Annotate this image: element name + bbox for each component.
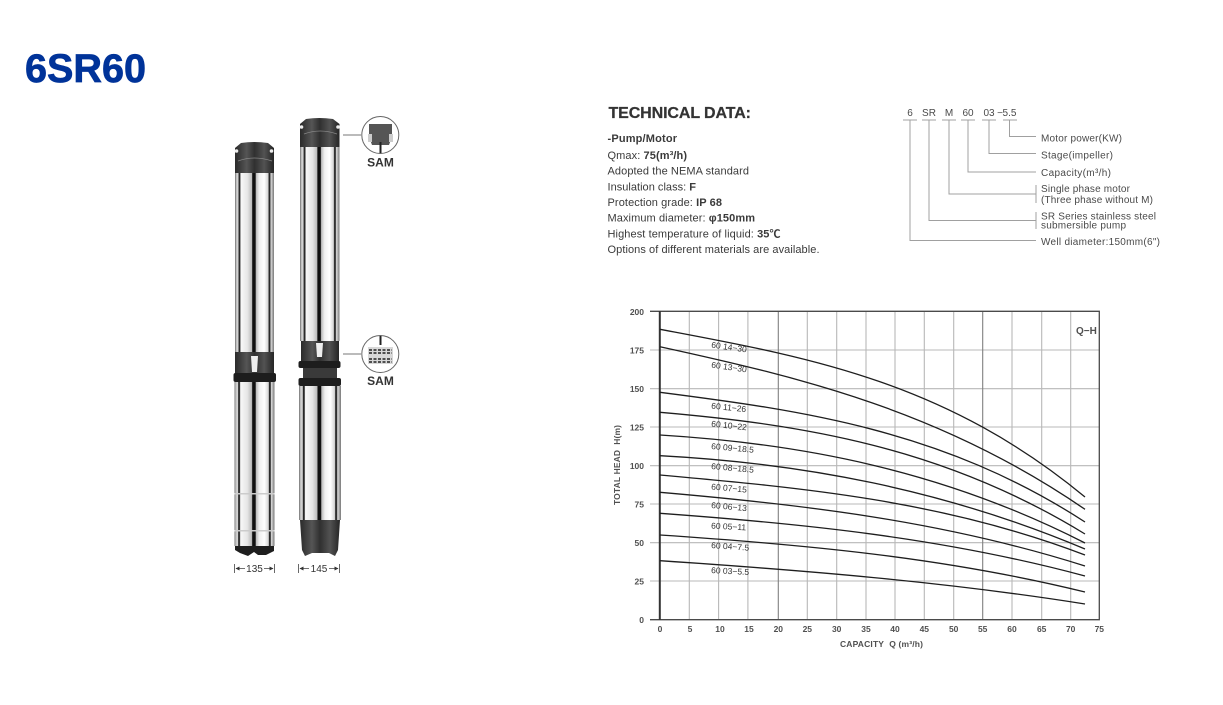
model code characters: M [945,108,953,119]
x axis values: 75 [1095,624,1104,634]
x axis values: 50 [949,624,959,634]
y axis values: 25 [635,576,644,586]
x axis values: 55 [978,624,988,634]
curve labels: 60 13−30 [711,360,748,374]
technical data list: Qmax: 75(m³/h) [608,150,687,162]
model code characters [907,108,1017,119]
curve labels: 60 04−7.5 [711,540,750,553]
model code characters: 03 [983,108,995,119]
technical data list: Protection grade: IP 68 [608,197,722,209]
x axis values: 45 [920,624,929,634]
technical data heading: TECHNICAL DATA: [608,105,751,122]
callout: top SAM detail: SAM [367,156,394,170]
x axis values: 30 [832,624,842,634]
curve labels [711,340,755,577]
x axis values: 5 [688,624,693,634]
y axis values: 150 [630,384,644,394]
x axis values: 40 [890,624,900,634]
dimension: 135 [234,564,274,575]
model code legend: Capacity(m³/h) [1041,168,1111,179]
x axis values: 35 [861,624,871,634]
x axis values: 15 [744,624,754,634]
model code legend: SR Series stainless steel [1041,212,1156,222]
curve labels: 60 11−26 [711,401,747,414]
curve labels: 60 03−5.5 [711,565,750,577]
callout: lower SAM detail [343,336,399,388]
x axis values: 70 [1066,624,1076,634]
technical data list [608,133,820,256]
model code characters: − [997,108,1003,119]
model code legend: Motor power(KW) [1041,134,1122,144]
curve labels: 60 09−18.5 [711,441,755,455]
model code characters: 6 [907,108,913,119]
curve labels: 60 14−30 [711,340,748,354]
technical data list: Adopted the NEMA standard [608,166,749,178]
x axis values: 20 [774,624,783,634]
technical data list: Maximum diameter: φ150mm [608,212,755,224]
technical data list: Options of different materials are available. [608,244,820,256]
leader lines [903,120,1036,240]
technical data list: Insulation class: F [608,182,696,194]
model code legend [1041,134,1160,248]
y axis title: TOTAL HEAD H(m) [612,425,622,505]
model code diagram [903,108,1160,248]
callout: top SAM detail [343,116,399,170]
y axis values: 200 [630,307,644,317]
y axis values: 75 [635,500,644,510]
Q-H performance chart [612,307,1104,649]
dimension: 145: 145 [311,564,328,575]
x axis title: CAPACITY Q (m³/h) [840,639,923,649]
chart axes and frame [650,311,1099,620]
x axis values: 25 [803,624,812,634]
y axis values [630,307,644,625]
y axis values: 125 [630,422,644,432]
dimension: 135: 135 [246,564,263,575]
x axis values: 65 [1037,624,1047,634]
curve labels: 60 06−13 [711,500,748,513]
technical data list: Highest temperature of liquid: 35℃ [608,228,780,240]
pump: 135 model [234,142,276,556]
model code legend: Well diameter:150mm(6") [1041,237,1160,248]
y axis values: 100 [630,461,644,471]
callout: lower SAM detail: SAM [367,374,394,388]
model code legend: Stage(impeller) [1041,150,1113,162]
x axis values [658,624,1104,634]
curve labels: 60 05−11 [711,521,747,532]
curve labels: 60 10−22 [711,419,748,432]
y axis values: 50 [635,538,644,548]
curve labels: 60 08−18.5 [711,461,755,475]
title: 6SR60 [25,47,146,91]
model code legend: (Three phase without M) [1041,195,1153,206]
dimension: 145 [298,564,340,575]
model code characters: SR [922,108,936,119]
pump: 145 model [298,118,341,556]
Q-H tag: Q−H [1076,326,1097,337]
technical data list: -Pump/Motor [608,133,678,145]
pump illustrations [234,116,399,575]
x axis values: 60 [1007,624,1017,634]
x axis values: 0 [658,624,663,634]
y axis values: 175 [630,346,644,356]
performance curves [660,329,1085,604]
x axis values: 10 [715,624,725,634]
model code characters: 5.5 [1003,108,1017,119]
curve labels: 60 07−15 [711,482,748,495]
model code legend: Single phase motor [1041,184,1131,195]
model code legend: submersible pump [1041,220,1126,232]
model code characters: 60 [962,108,974,119]
y axis values: 0 [639,615,644,625]
chart grid [650,311,1099,620]
